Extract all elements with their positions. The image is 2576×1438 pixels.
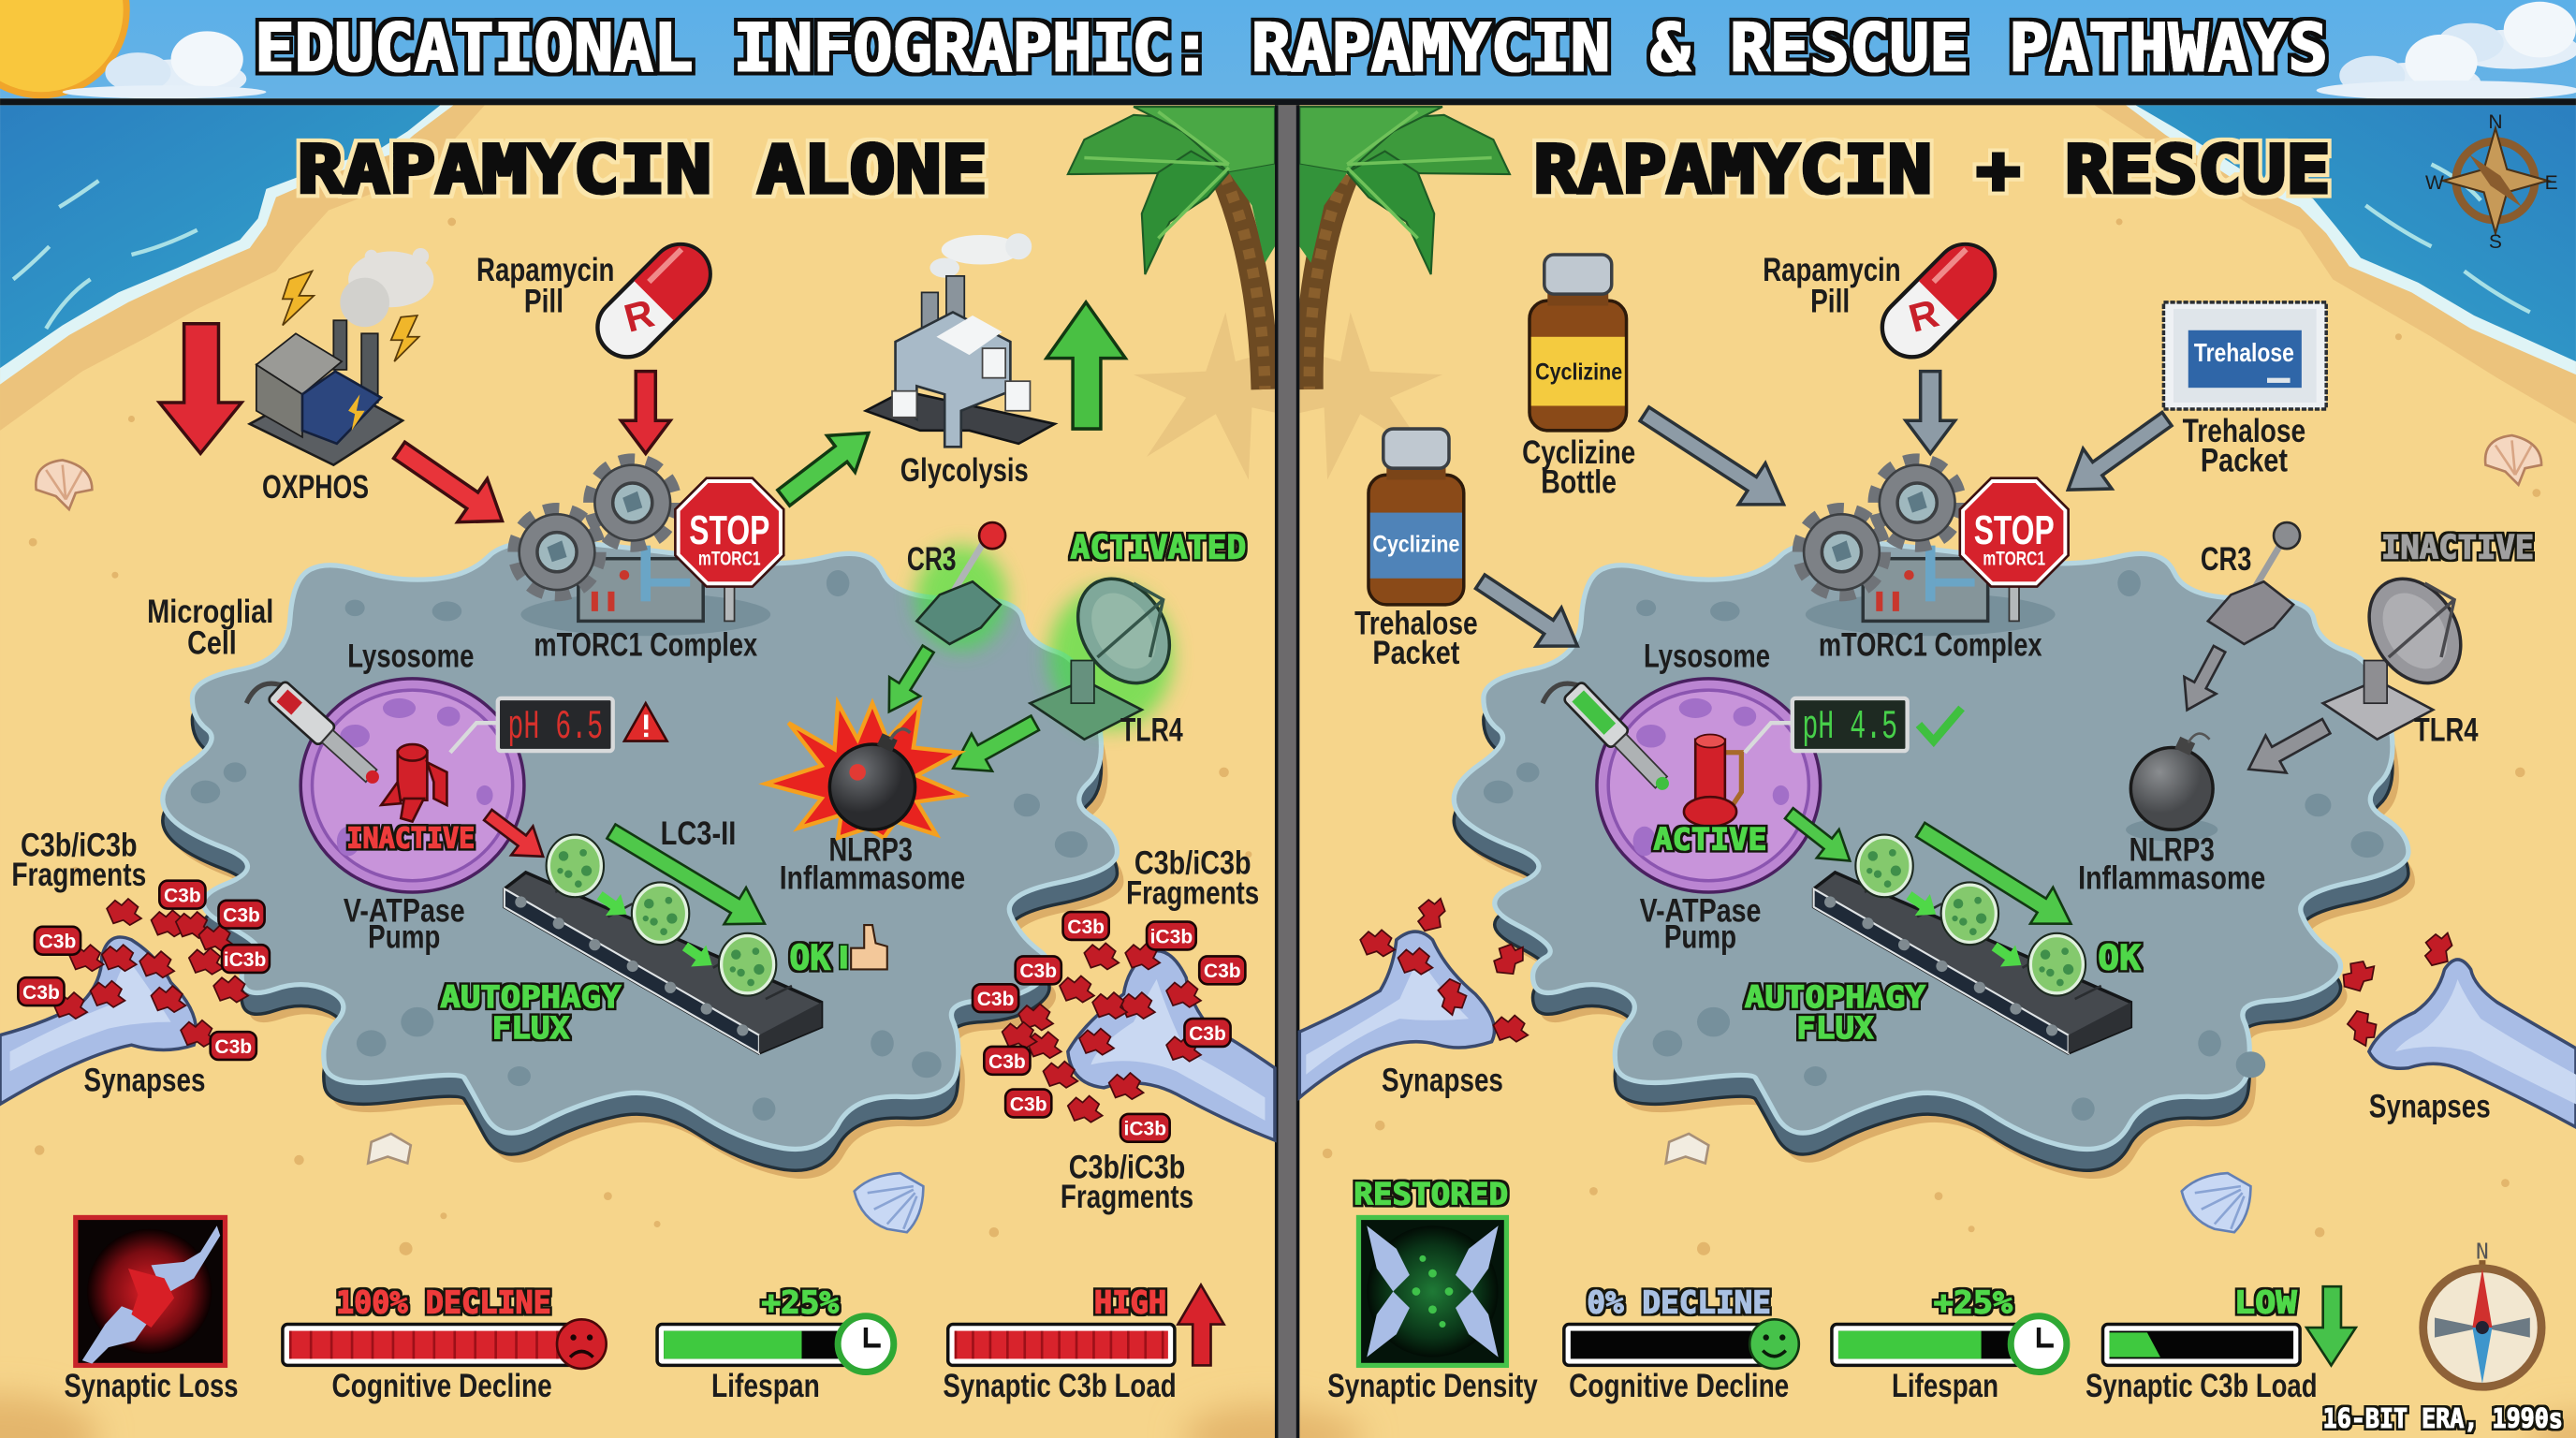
- lysosome right: [1597, 679, 1821, 892]
- arrow: cyclizine blue to cell: [1468, 563, 1590, 666]
- status: active: ACTIVE: [1653, 823, 1767, 857]
- label: Trehalose Packet lower left: Trehalose: [1354, 605, 1478, 641]
- pH 4.5 readout: [1745, 698, 1908, 753]
- stat: lifespan rescue: [1832, 1284, 2067, 1404]
- label: V-ATPase Pump right: [1640, 893, 1761, 956]
- stat: synaptic C3b load alone: [943, 1284, 1224, 1404]
- C3b tags right: C3b: [977, 989, 1014, 1010]
- icon: rapamycin pill right: [1870, 232, 2007, 369]
- ocean right: [2095, 105, 2576, 424]
- panel heading: rapamycin alone: RAPAMYCIN ALONE: [298, 131, 988, 208]
- status: autophagy flux right: [1745, 981, 1925, 1046]
- stat: cognitive decline rescue: 0% DECLINE: [1587, 1284, 1771, 1320]
- TLR4 dish right: [2323, 562, 2480, 740]
- pH 4.5 readout: pH 4.5: [1802, 704, 1897, 751]
- icon: V-ATPase pump inactive: [381, 744, 446, 822]
- status: OK with thumb: OK: [789, 937, 831, 977]
- label: NLRP3 Inflammasome left: [780, 832, 965, 896]
- label: TLR4 right: TLR4: [2414, 712, 2479, 749]
- status: autophagy flux left: AUTOPHAGY: [440, 981, 621, 1015]
- icon: pH probe left: [246, 681, 387, 791]
- icon: compass rose: N: [2488, 111, 2503, 133]
- arrow: cyclizine to mTORC1: [1632, 393, 1797, 525]
- stat: synaptic C3b load alone: Synaptic C3b Load: [943, 1368, 1177, 1404]
- label: NLRP3 Inflammasome right: NLRP3: [2130, 832, 2215, 869]
- arrow: big red OXPHOS down: [159, 324, 242, 453]
- autophagy conveyor right: [1814, 835, 2130, 1053]
- label: Rapamycin Pill left: Pill: [524, 283, 564, 319]
- icon: V-ATPase pump active: [1684, 734, 1741, 827]
- icon: cyclizine bottle blue: [1368, 429, 1464, 605]
- icon: compass rose: [2425, 111, 2558, 253]
- icon: warning triangle: [624, 703, 667, 741]
- arrow: LC3-II left: [600, 813, 776, 942]
- synapse left in alone panel: [0, 899, 248, 1104]
- status: OK right: OK: [2098, 937, 2142, 977]
- label: Microglial Cell: Cell: [187, 625, 237, 662]
- arrow: OXPHOS to mTORC1: [385, 429, 517, 543]
- C3b tags right: [973, 912, 1245, 1142]
- stat: synaptic loss icon: [76, 1217, 225, 1365]
- stat: synaptic C3b load rescue: Synaptic C3b Load: [2086, 1368, 2318, 1404]
- icon: trehalose packet: [2163, 302, 2326, 409]
- label: V-ATPase Pump right: Pump: [1664, 919, 1736, 956]
- stat: lifespan rescue: Lifespan: [1892, 1368, 1998, 1404]
- stat: cognitive decline alone: Cognitive Decline: [332, 1368, 552, 1404]
- C3b tags left: C3b: [164, 886, 201, 907]
- stat: synaptic C3b load alone: HIGH: [1094, 1284, 1166, 1320]
- palm tree left: [1068, 107, 1275, 389]
- label: Microglial Cell: [147, 594, 273, 662]
- label: Synapses left a: Synapses: [84, 1062, 205, 1098]
- NLRP3 bomb exploding: [766, 703, 963, 838]
- label: NLRP3 Inflammasome left: Inflammasome: [780, 859, 965, 896]
- mTORC1 complex left: mTORC1: [698, 549, 761, 570]
- mTORC1 complex right: mTORC1 Complex: [1819, 626, 2042, 663]
- C3b tags left: C3b: [223, 905, 260, 927]
- label: Synaptic Loss: Synaptic Loss: [65, 1368, 239, 1404]
- icon: shells right: [1666, 435, 2541, 1232]
- icon: OXPHOS factory: [250, 248, 433, 465]
- label: Microglial Cell: Microglial: [147, 594, 273, 630]
- label: CR3 left: CR3: [907, 541, 956, 578]
- label: C3b fragments upper right: Fragments: [1126, 874, 1259, 911]
- arrow: pill to mTORC1 right: [1906, 372, 1955, 453]
- icon: cyclizine bottle yellow: Cyclizine: [1535, 360, 1622, 385]
- label: Rapamycin Pill right: [1763, 252, 1901, 319]
- icon: shells left: [36, 460, 923, 1232]
- label: Synapses rescue left: Synapses: [1382, 1062, 1503, 1098]
- label: Lysosome right: Lysosome: [1644, 638, 1770, 675]
- icon: compass rose: E: [2545, 172, 2558, 194]
- icon: trehalose packet: Trehalose: [2194, 338, 2294, 367]
- CR3 lever right: [2208, 522, 2300, 644]
- label: Synaptic Density: Synaptic Density: [1327, 1368, 1538, 1404]
- icon: cyclizine bottle yellow: [1530, 255, 1627, 431]
- CR3 lever left: [915, 522, 1007, 651]
- icon: compass rose: W: [2425, 172, 2444, 194]
- palm shadow right: [1295, 312, 1442, 479]
- pH 6.5 readout: pH 6.5: [507, 704, 603, 751]
- stat: lifespan rescue: +25%: [1934, 1284, 2012, 1320]
- C3b tags right: C3b: [1204, 961, 1241, 982]
- label: Cyclizine Bottle: Cyclizine: [1522, 434, 1635, 471]
- pH 6.5 readout: [450, 698, 613, 753]
- label: V-ATPase Pump right: V-ATPase: [1640, 893, 1761, 930]
- label: V-ATPase Pump left: Pump: [368, 919, 440, 956]
- C3b tags left: iC3b: [224, 949, 266, 971]
- status: inactive: INACTIVE: [346, 823, 475, 856]
- stat: synaptic C3b load rescue: [2086, 1284, 2356, 1404]
- C3b tags right: C3b: [1189, 1023, 1226, 1045]
- status: autophagy flux left: [440, 981, 621, 1046]
- label: C3b fragments upper right: [1126, 845, 1259, 911]
- stat: lifespan alone: Lifespan: [711, 1368, 820, 1404]
- label: Synapses rescue right: Synapses: [2369, 1088, 2491, 1124]
- label: Trehalose Packet upper right: [2183, 413, 2305, 479]
- palm shadow left: [1134, 312, 1281, 479]
- mTORC1 complex right: [1801, 462, 2069, 663]
- label: LC3-II left: LC3-II: [661, 815, 736, 852]
- status: OK with thumb: [789, 925, 887, 977]
- NLRP3 bomb inert: [2126, 734, 2217, 842]
- label: Rapamycin Pill right: Pill: [1810, 283, 1850, 319]
- label: C3b fragments upper left: C3b/iC3b: [21, 827, 138, 863]
- label: C3b fragments upper left: [11, 827, 146, 893]
- label: Rapamycin Pill right: Rapamycin: [1763, 252, 1901, 288]
- label: Trehalose Packet upper right: Trehalose: [2183, 413, 2305, 449]
- label: V-ATPase Pump left: V-ATPase: [344, 893, 465, 930]
- C3b tags left: [18, 881, 270, 1060]
- label: Trehalose Packet upper right: Packet: [2201, 443, 2288, 479]
- mTORC1 complex left: [516, 462, 783, 663]
- microglial cell left: [163, 541, 1123, 1179]
- label: Cyclizine Bottle: Bottle: [1541, 464, 1617, 501]
- label: NLRP3 Inflammasome left: NLRP3: [828, 832, 913, 869]
- synapse right in alone panel: [1003, 943, 1275, 1140]
- label: Cyclizine Bottle: [1522, 434, 1635, 501]
- status: inactive receptor: INACTIVE: [2381, 529, 2534, 567]
- C3b tags left: C3b: [22, 982, 60, 1004]
- sand corner shading: [0, 1395, 2576, 1438]
- C3b tags right: C3b: [1067, 917, 1105, 938]
- mTORC1 complex right: STOP: [1974, 507, 2055, 553]
- C3b tags right: iC3b: [1150, 926, 1193, 947]
- label: NLRP3 Inflammasome right: Inflammasome: [2078, 859, 2265, 896]
- synapse left in rescue panel: [1299, 895, 1529, 1097]
- label: TLR4 left: TLR4: [1120, 712, 1183, 749]
- stat: lifespan alone: [657, 1284, 894, 1404]
- arrow: TLR4 to NLRP3 left: [943, 704, 1046, 787]
- label: C3b fragments bottom: [1061, 1149, 1193, 1215]
- status: autophagy flux left: FLUX: [492, 1012, 569, 1046]
- header sky banner: [0, 0, 2576, 105]
- panel heading: rapamycin + rescue: RAPAMYCIN + RESCUE: [1533, 131, 2331, 208]
- icon: rapamycin pill left: R: [620, 291, 658, 341]
- icon: green check: [1919, 708, 1962, 741]
- ocean left: [0, 105, 485, 431]
- label: C3b fragments upper right: C3b/iC3b: [1134, 845, 1251, 882]
- label: Trehalose Packet lower left: Packet: [1372, 635, 1460, 671]
- icon: brass compass: [2423, 1240, 2541, 1387]
- label: C3b fragments upper left: Fragments: [11, 857, 146, 893]
- arrow: TLR4 to NLRP3 right: [2238, 708, 2336, 788]
- arrow: pill to mTORC1 left: [621, 372, 670, 453]
- lysosome left: [300, 679, 524, 892]
- main title: EDUCATIONAL INFOGRAPHIC: RAPAMYCIN & RESCUE PATHWAYS: [255, 9, 2328, 86]
- icon: compass rose: S: [2489, 231, 2502, 253]
- C3b tags right: iC3b: [1124, 1119, 1166, 1140]
- label: Rapamycin Pill left: [476, 252, 614, 319]
- C3b tags left: C3b: [214, 1036, 252, 1058]
- stat: synaptic C3b load rescue: LOW: [2234, 1284, 2298, 1320]
- mTORC1 complex right: mTORC1: [1983, 549, 2045, 570]
- TLR4 dish left: [1030, 562, 1188, 740]
- C3b tags right: C3b: [988, 1051, 1026, 1073]
- label: Lysosome left: Lysosome: [347, 638, 474, 675]
- label: Rapamycin Pill left: Rapamycin: [476, 252, 614, 288]
- stat: cognitive decline alone: [283, 1284, 607, 1404]
- C3b tags right: C3b: [1019, 961, 1057, 982]
- stat: cognitive decline rescue: Cognitive Decline: [1569, 1368, 1789, 1404]
- icon: rapamycin pill right: R: [1904, 291, 1943, 341]
- label: C3b fragments bottom: Fragments: [1061, 1179, 1193, 1215]
- stat: synaptic density icon: [1358, 1217, 1506, 1365]
- icon: glycolysis factory: [866, 233, 1055, 447]
- label: C3b fragments bottom: C3b/iC3b: [1069, 1149, 1185, 1185]
- synapse right in rescue panel: [2336, 930, 2576, 1127]
- arrow: pump to autophagy right: [1778, 800, 1861, 875]
- arrow: mTORC1 to glycolysis: [769, 415, 883, 516]
- label: CR3 right: CR3: [2201, 541, 2251, 578]
- center divider: [1275, 105, 1299, 1438]
- stat: restored badge: RESTORED: [1354, 1178, 1508, 1211]
- arrow: pump to autophagy left: [477, 800, 554, 871]
- icon: pH probe right: [1543, 681, 1676, 798]
- stat: lifespan alone: +25%: [762, 1284, 839, 1320]
- arrow: trehalose to mTORC1: [2054, 399, 2181, 510]
- stat: cognitive decline alone: 100% DECLINE: [336, 1284, 551, 1320]
- label: Trehalose Packet lower left: [1354, 605, 1478, 671]
- icon: rapamycin pill left: [585, 232, 723, 369]
- arrow: big green glycolysis up: [1046, 302, 1125, 429]
- autophagy conveyor left: [505, 835, 822, 1053]
- C3b tags left: C3b: [39, 932, 76, 953]
- label: OXPHOS: OXPHOS: [262, 469, 369, 506]
- arrow: CR3 to NLRP3 left: [873, 639, 944, 721]
- status: activated: ACTIVATED: [1070, 529, 1246, 567]
- palm tree right: [1299, 107, 1510, 389]
- C3b tags right: C3b: [1010, 1093, 1047, 1115]
- arrow: CR3 to NLRP3 right: [2171, 640, 2235, 718]
- arrow: LC3-II right: [1910, 812, 2083, 942]
- label: Glycolysis: Glycolysis: [900, 452, 1029, 489]
- mTORC1 complex left: mTORC1 Complex: [534, 626, 757, 663]
- icon: cyclizine bottle blue: Cyclizine: [1372, 533, 1459, 558]
- sand speckles: [29, 218, 2540, 1255]
- status: autophagy flux right: FLUX: [1796, 1012, 1874, 1046]
- icon: brass compass: N: [2476, 1240, 2489, 1264]
- status: autophagy flux right: AUTOPHAGY: [1745, 981, 1925, 1015]
- label: NLRP3 Inflammasome right: [2078, 832, 2265, 896]
- label: V-ATPase Pump left: [344, 893, 465, 956]
- stat: cognitive decline rescue: [1564, 1284, 1799, 1404]
- microglial cell right: [1454, 541, 2415, 1179]
- mTORC1 complex left: STOP: [689, 507, 769, 553]
